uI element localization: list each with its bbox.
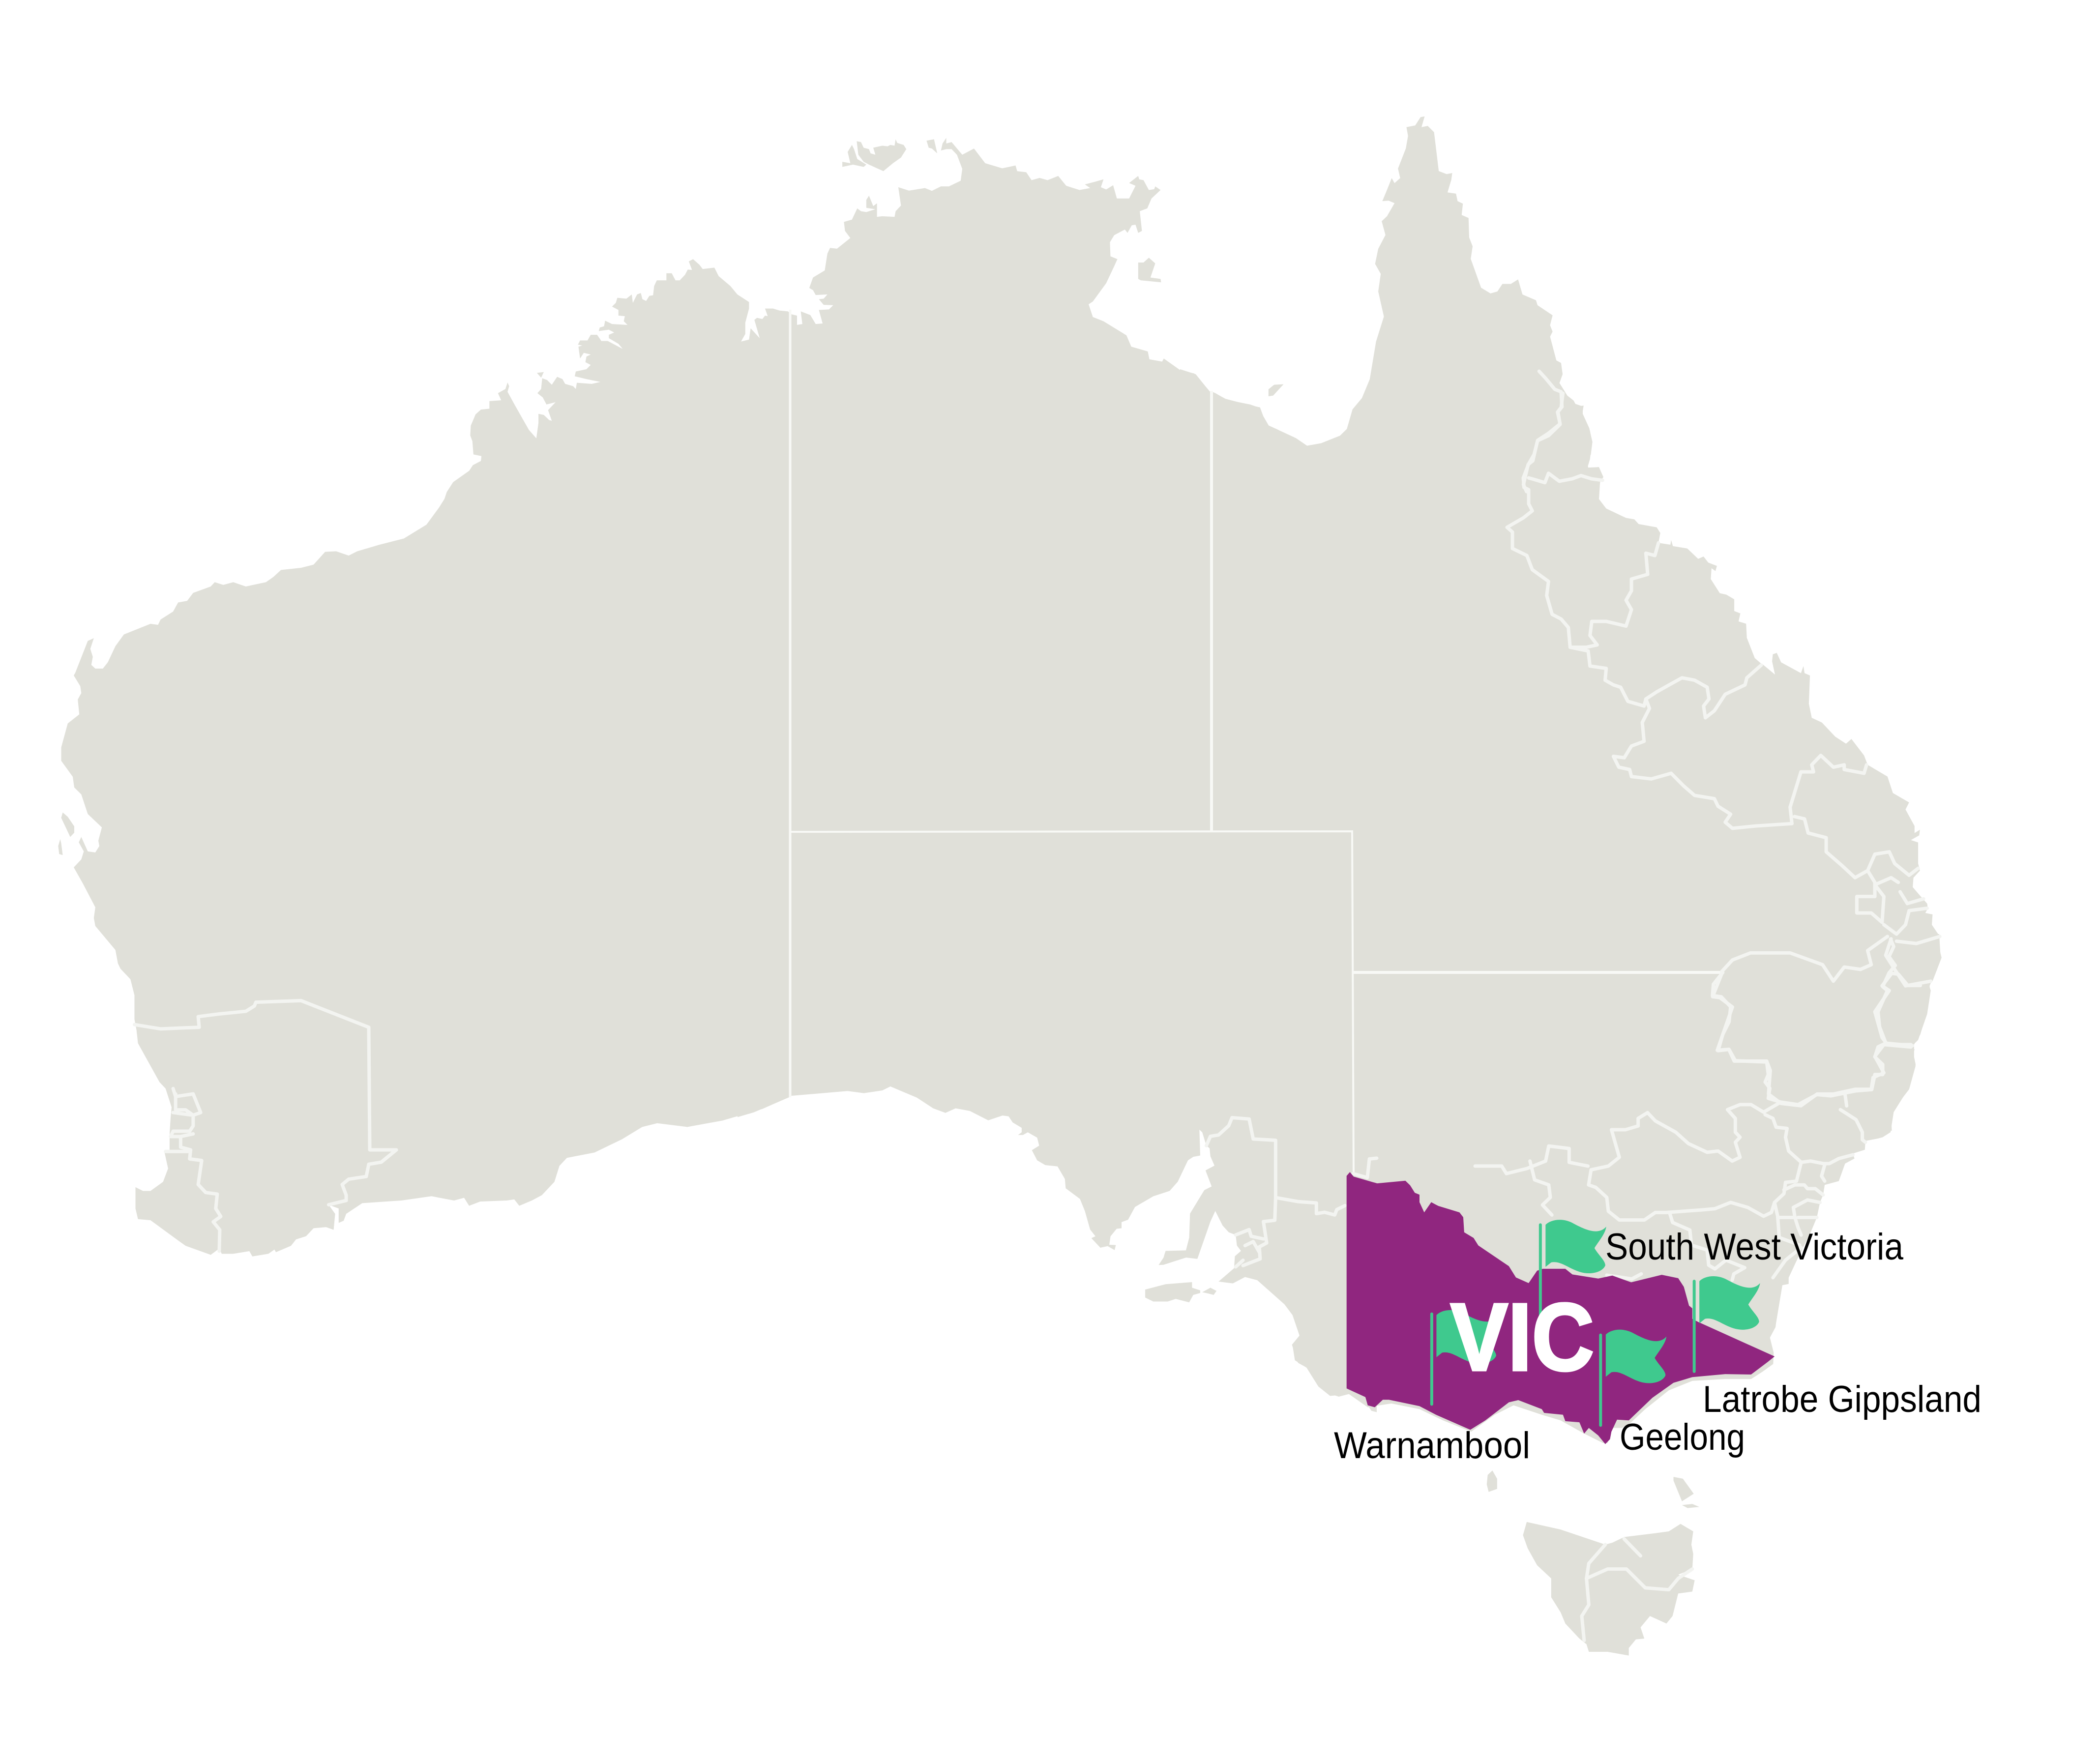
label: Warnambool: Warnambool (1334, 1425, 1530, 1466)
flag: South West Victoria (1540, 1220, 1606, 1315)
flag: Geelong (1600, 1330, 1666, 1425)
label: South West Victoria: South West Victoria (1605, 1226, 1904, 1268)
map: Victoria highlighted state (1347, 1172, 1775, 1444)
map: state borders (790, 310, 1723, 1175)
heading: VIC: VIC (1450, 1284, 1594, 1391)
label: Latrobe Gippsland: Latrobe Gippsland (1703, 1378, 1982, 1420)
map: regional boundary lines (134, 371, 1940, 1641)
label: Geelong: Geelong (1620, 1416, 1745, 1458)
map: Australia landmass (58, 117, 1942, 1656)
flag: Warnambool (1432, 1310, 1497, 1404)
flag: Latrobe Gippsland (1694, 1276, 1760, 1372)
